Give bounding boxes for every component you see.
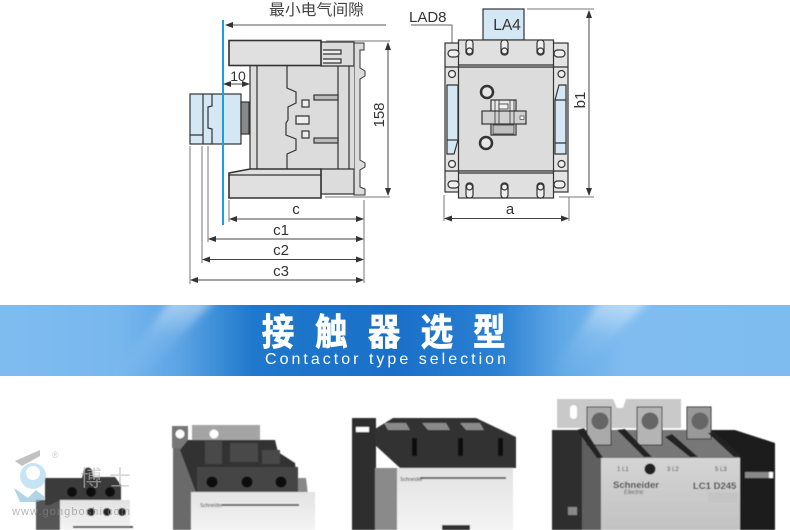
watermark logo: 士	[109, 466, 131, 491]
product photo 2	[172, 425, 315, 530]
heading: minimum electrical clearance: 最小电气间隙	[269, 1, 364, 19]
dimension: c2: c2	[273, 242, 289, 259]
extension lines	[190, 146, 364, 284]
product photo 3: Schneider	[400, 477, 423, 483]
dimension: 10	[224, 68, 249, 84]
dimension: c	[230, 201, 363, 219]
auxiliary block in blue	[190, 94, 249, 144]
watermark logo	[11, 450, 131, 518]
upper right block	[321, 42, 354, 66]
dimension: a: a	[506, 201, 515, 218]
dimension: c3: c3	[273, 263, 289, 280]
terminals	[587, 407, 611, 445]
dimension: b1: b1	[572, 92, 589, 108]
banner subtitle: Contactor type selection	[265, 351, 506, 368]
product photo 4	[552, 399, 775, 530]
product photo 4: 3 L2	[667, 467, 679, 473]
dimension: c1: c1	[273, 222, 289, 239]
lower right block	[321, 169, 354, 194]
product photo 2: Schneider	[200, 503, 223, 509]
terminal slots and mounting holes	[448, 40, 565, 198]
contactor side body	[229, 40, 365, 198]
product photo 1	[36, 468, 133, 530]
center mechanism	[491, 100, 516, 135]
watermark logo: ®	[52, 450, 59, 460]
contactor front body	[445, 40, 568, 198]
product photo 4: Electric	[624, 490, 644, 496]
product photo 4: 1 L1	[617, 467, 629, 473]
product photo 4: 5 L3	[715, 467, 727, 473]
dimension: 158: 158	[371, 102, 388, 128]
dimension: 10: 10	[230, 68, 246, 84]
watermark logo: 博	[80, 466, 102, 491]
round pins	[481, 86, 493, 98]
product photo 3	[352, 418, 516, 530]
banner title: 接触器选型	[262, 304, 506, 357]
side view technical drawing	[190, 1, 390, 284]
LAD8 callout	[409, 9, 453, 110]
product photo 4: Schneider	[613, 480, 659, 491]
LAD8 callout: LAD8	[409, 9, 447, 26]
blue side modules	[447, 85, 458, 154]
LA4 module	[483, 9, 524, 40]
front view technical drawing	[409, 9, 594, 221]
watermark logo: www.gongboshi.com	[11, 506, 130, 518]
arrow: clearance direction	[226, 24, 386, 26]
banner: contactor type selection	[0, 300, 790, 380]
product photo 4: LC1 D245	[693, 481, 737, 492]
LA4 module: LA4	[493, 17, 521, 34]
dimension: a	[444, 195, 569, 221]
ridges	[577, 428, 742, 458]
dimension: c: c	[292, 201, 300, 218]
minimum clearance blue line	[222, 20, 224, 225]
